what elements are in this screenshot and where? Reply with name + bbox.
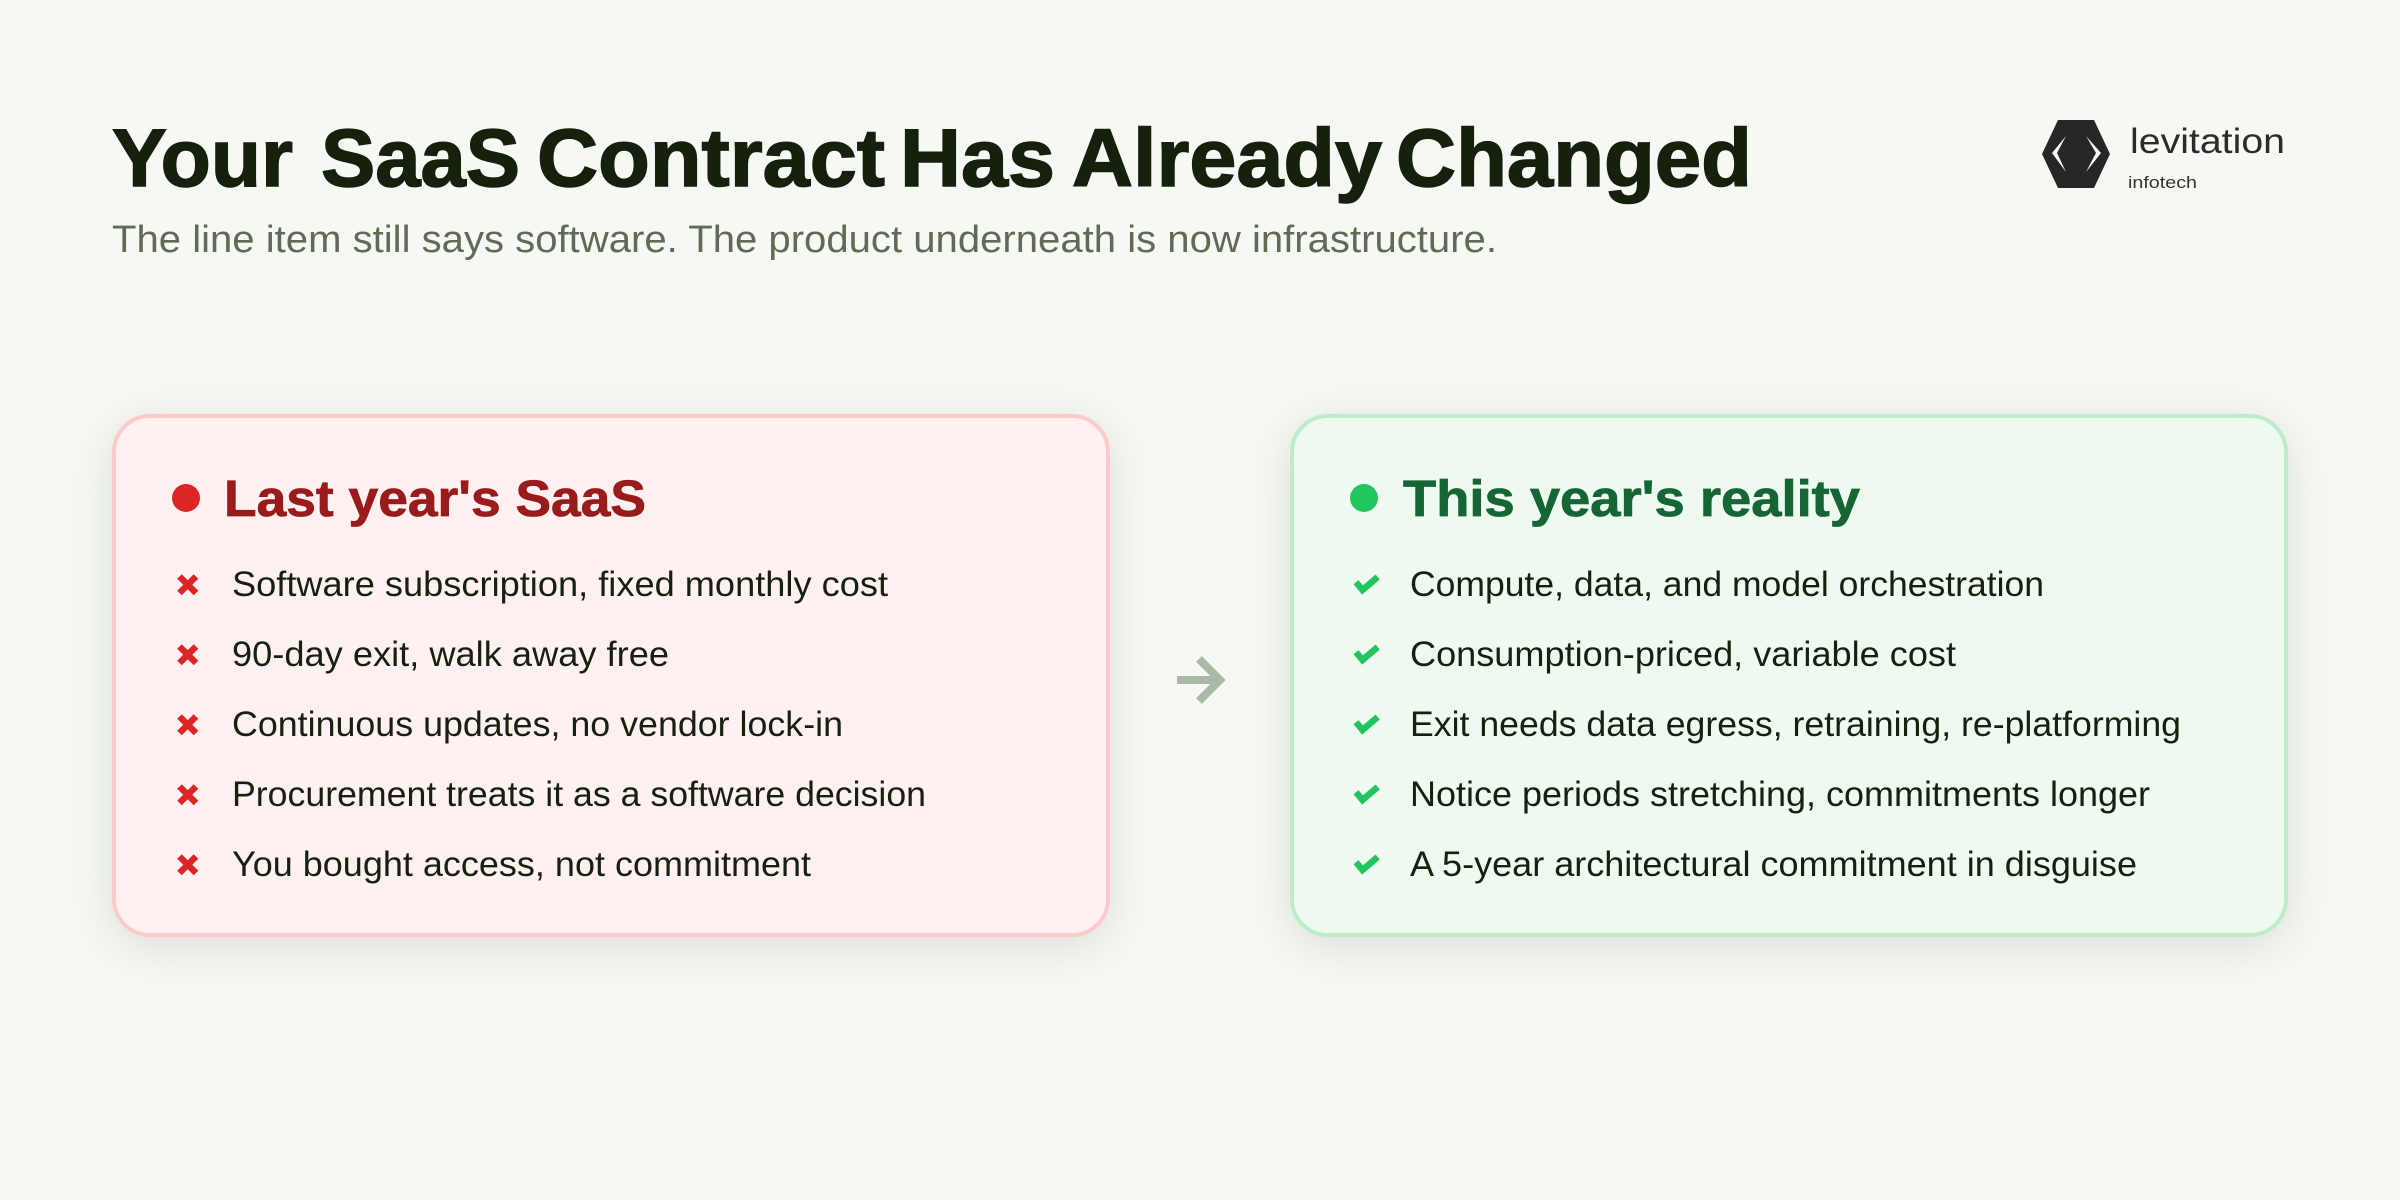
list item: software subscription: Software subscription, fixed monthly cost bbox=[232, 565, 888, 604]
arrow: last year to this year bbox=[1177, 656, 1226, 704]
logo wordmark: levitation bbox=[2130, 122, 2285, 161]
icon: hexagon with chevrons bbox=[2042, 120, 2110, 188]
header: title and subtitle bbox=[112, 113, 1752, 261]
panel: last year's SaaS bbox=[112, 414, 1110, 937]
list item: consumption: Consumption-priced, variable cost bbox=[1410, 635, 1956, 674]
list item: 5-year commitment: A 5-year architectural commitment in disguise bbox=[1410, 845, 2137, 884]
logo: levitation infotech bbox=[2042, 120, 2285, 192]
panel heading: Last year's SaaS bbox=[224, 470, 646, 527]
title: Changed bbox=[1396, 113, 1752, 204]
list item: exit: Exit needs data egress, retraining, re-platforming bbox=[1410, 705, 2181, 744]
list item: continuous updates: Continuous updates, no vendor lock-in bbox=[232, 705, 843, 744]
panel heading: This year's reality bbox=[1403, 470, 1861, 527]
title: Already bbox=[1072, 113, 1382, 204]
title: SaaS bbox=[321, 113, 520, 204]
list item: notice periods: Notice periods stretching, commitments longer bbox=[1410, 775, 2150, 814]
list item: 90-day exit: 90-day exit, walk away free bbox=[232, 635, 669, 674]
red status dot bbox=[172, 484, 200, 512]
green status dot bbox=[1350, 484, 1378, 512]
title bbox=[112, 113, 1752, 204]
title: Contract bbox=[537, 113, 885, 204]
title: Your bbox=[112, 113, 293, 204]
subtitle: The line item still says software. The product underneath is now infrastructure. bbox=[112, 219, 1497, 261]
title: Has bbox=[900, 113, 1055, 204]
logo subtext: infotech bbox=[2128, 173, 2197, 192]
panel: this year's reality bbox=[1290, 414, 2288, 937]
list item: bought access: You bought access, not commitment bbox=[232, 845, 811, 884]
list item: procurement: Procurement treats it as a software decision bbox=[232, 775, 926, 814]
list item: compute: Compute, data, and model orchestration bbox=[1410, 565, 2044, 604]
